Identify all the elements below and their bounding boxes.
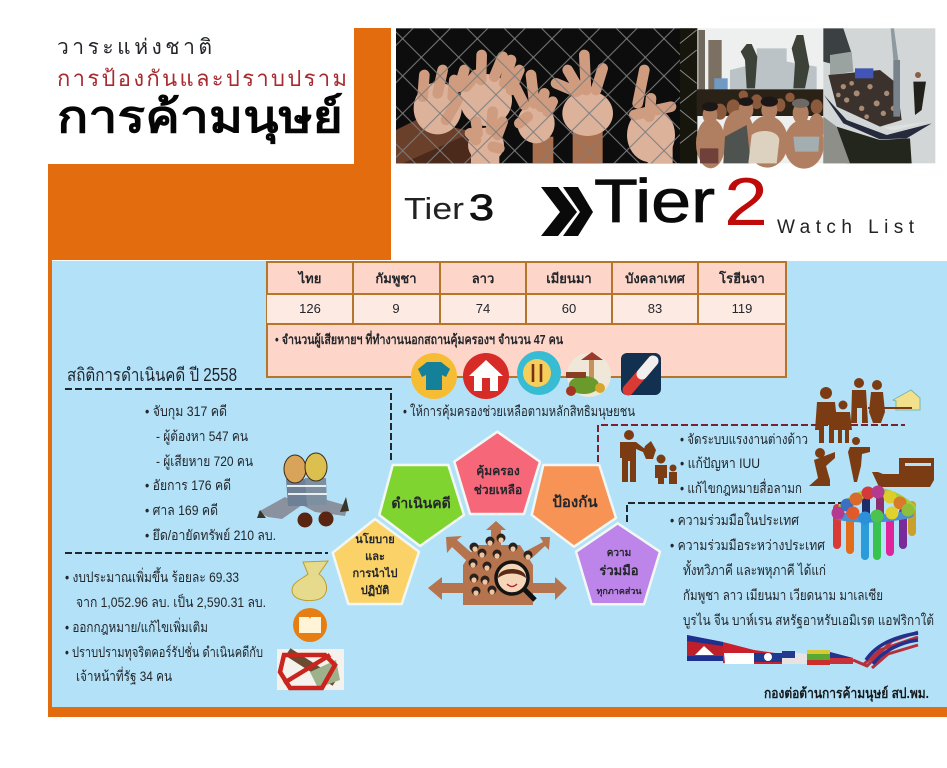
shelter bullet text: • ให้การคุ้มครองช่วยเหลือตามหลักสิทธิมนุษยชน [403, 403, 635, 420]
prosecution statistics list: - ผู้ต้องหา 547 คน [156, 428, 248, 445]
title block [57, 36, 347, 145]
table header row [297, 270, 765, 287]
policy list: • ออกกฎหมาย/แก้ไขเพิ่มเติม [65, 618, 208, 635]
table header row: ไทย [297, 270, 321, 286]
Tier 2 label: Tier [594, 167, 715, 235]
icon: money bag [292, 561, 328, 601]
icon: family and house [815, 378, 920, 443]
table header row: โรฮีนจา [718, 270, 765, 286]
prosecution statistics list: - ผู้เสียหาย 720 คน [156, 453, 253, 470]
title line 3: การค้ามนุษย์ [57, 92, 343, 145]
pentagon: cooperation [576, 523, 660, 604]
table header row: เมียนมา [546, 271, 592, 286]
prosecution statistics list: • ยึด/อายัดทรัพย์ 210 ลบ. [145, 527, 276, 543]
table values row: 126 [299, 301, 321, 316]
pentagon labels: ดำเนินคดี [391, 495, 451, 511]
icon: shirt [411, 353, 457, 399]
prevention list [680, 431, 808, 496]
pentagon labels: ความ [607, 548, 631, 559]
table values row: 74 [476, 301, 490, 316]
table header row: กัมพูชา [375, 271, 417, 287]
icon: medicine capsule [621, 353, 661, 395]
table header row: ลาว [472, 271, 494, 286]
icon row: basic needs [411, 351, 661, 399]
prevention list: • แก้ปัญหา IUU [680, 455, 760, 471]
prosecution statistics list: • จับกุม 317 คดี [145, 403, 227, 420]
boat picture [823, 28, 935, 163]
prevention list: • จัดระบบแรงงานต่างด้าว [680, 431, 808, 447]
table: victims by nationality [267, 262, 786, 377]
Tier 3 label [404, 187, 494, 228]
pentagon labels: ช่วยเหลือ [474, 483, 522, 497]
prosecution statistics list [145, 403, 276, 543]
pentagon labels: นโยบาย [355, 532, 395, 546]
pentagon labels: ร่วมมือ [599, 563, 639, 578]
pentagon labels [353, 464, 642, 597]
cooperation list [670, 512, 934, 629]
pentagon labels: การนำไป [353, 566, 397, 580]
pentagon labels: ป้องกัน [552, 494, 598, 511]
policy list: จาก 1,052.96 ลบ. เป็น 2,590.31 ลบ. [76, 593, 266, 610]
table values row: 60 [562, 301, 576, 316]
table values row [299, 301, 752, 316]
icon: house [463, 353, 509, 399]
title line 1: วาระแห่งชาติ [57, 36, 212, 59]
pentagon labels: ปฏิบัติ [361, 584, 389, 597]
cooperation list: ทั้งทวิภาคี และพหุภาคี ได้แก่ [683, 560, 826, 579]
policy list: • ปราบปรามทุจริตคอร์รัปชั่น ดำเนินคดีกับ [65, 643, 263, 661]
cooperation list: • ความร่วมมือในประเทศ [670, 512, 799, 528]
prevention list: • แก้ไขกฎหมายสื่อลามก [680, 479, 802, 496]
table values row: 9 [392, 301, 400, 316]
policy list: • งบประมาณเพิ่มขึ้น ร้อยละ 69.33 [65, 567, 239, 585]
photo: rescued migrants and navy officers [680, 28, 935, 169]
Watch List label: Watch List [777, 217, 915, 238]
icon: shackled prisoners [257, 453, 349, 528]
Tier 2 label [594, 164, 768, 240]
pentagon: prosecution [379, 465, 464, 546]
table note: • จำนวนผู้เสียหายฯ ที่ทำงานนอกสถานคุ้มครองฯ จำนวน 47 คน [275, 330, 563, 348]
icon: photographer, fisherman and boat [809, 437, 934, 487]
photo: hands behind chain-link fence [396, 28, 698, 163]
table values row: 83 [648, 301, 662, 316]
pentagon labels: ทุกภาคส่วน [596, 586, 642, 597]
cooperation list: • ความร่วมมือระหว่างประเทศ [670, 537, 825, 553]
icon: food [517, 351, 561, 395]
icon: circle of people [832, 486, 914, 556]
pentagon labels: คุ้มครอง [476, 464, 520, 479]
pentagon: protection [454, 432, 540, 514]
pentagon diagram [333, 432, 660, 604]
prosecution statistics list: • อัยการ 176 คดี [145, 477, 231, 493]
icon: garden [566, 352, 611, 397]
dashed connector: prevention [598, 425, 905, 462]
Tier 3 label: Tier [404, 191, 464, 226]
table header row: บังคลาเทศ [625, 271, 686, 286]
prosecution statistics list: • ศาล 169 คดี [145, 502, 218, 518]
Tier 2 label: 2 [724, 164, 768, 240]
policy list [65, 567, 266, 685]
pentagon: policy [333, 519, 419, 604]
dashed connector: policy [65, 552, 328, 554]
Tier 3 label: 3 [469, 187, 494, 228]
heading: prosecution statistics: สถิติการดำเนินคดี ปี 2558 [67, 365, 237, 385]
icon: trafficker with children [620, 430, 677, 484]
icon: no corruption [277, 649, 344, 690]
table values row: 119 [732, 301, 752, 316]
dashed connector: prosecution [65, 389, 391, 463]
centre graphic: crowd and magnifier with arrows [428, 521, 567, 605]
icon: double chevron arrow [541, 187, 593, 236]
title line 2: การป้องกันและปราบปราม [57, 66, 347, 91]
cooperation list: กัมพูชา ลาว เมียนมา เวียดนาม มาเลเซีย [683, 587, 883, 604]
pentagon: prevention [532, 465, 616, 547]
dashed connector: cooperation [627, 503, 850, 522]
blue infographic panel [52, 261, 947, 707]
flags ribbon [687, 632, 918, 668]
icon: law book [293, 608, 327, 642]
pentagon labels: และ [365, 551, 385, 563]
policy list: เจ้าหน้าที่รัฐ 34 คน [76, 667, 172, 685]
